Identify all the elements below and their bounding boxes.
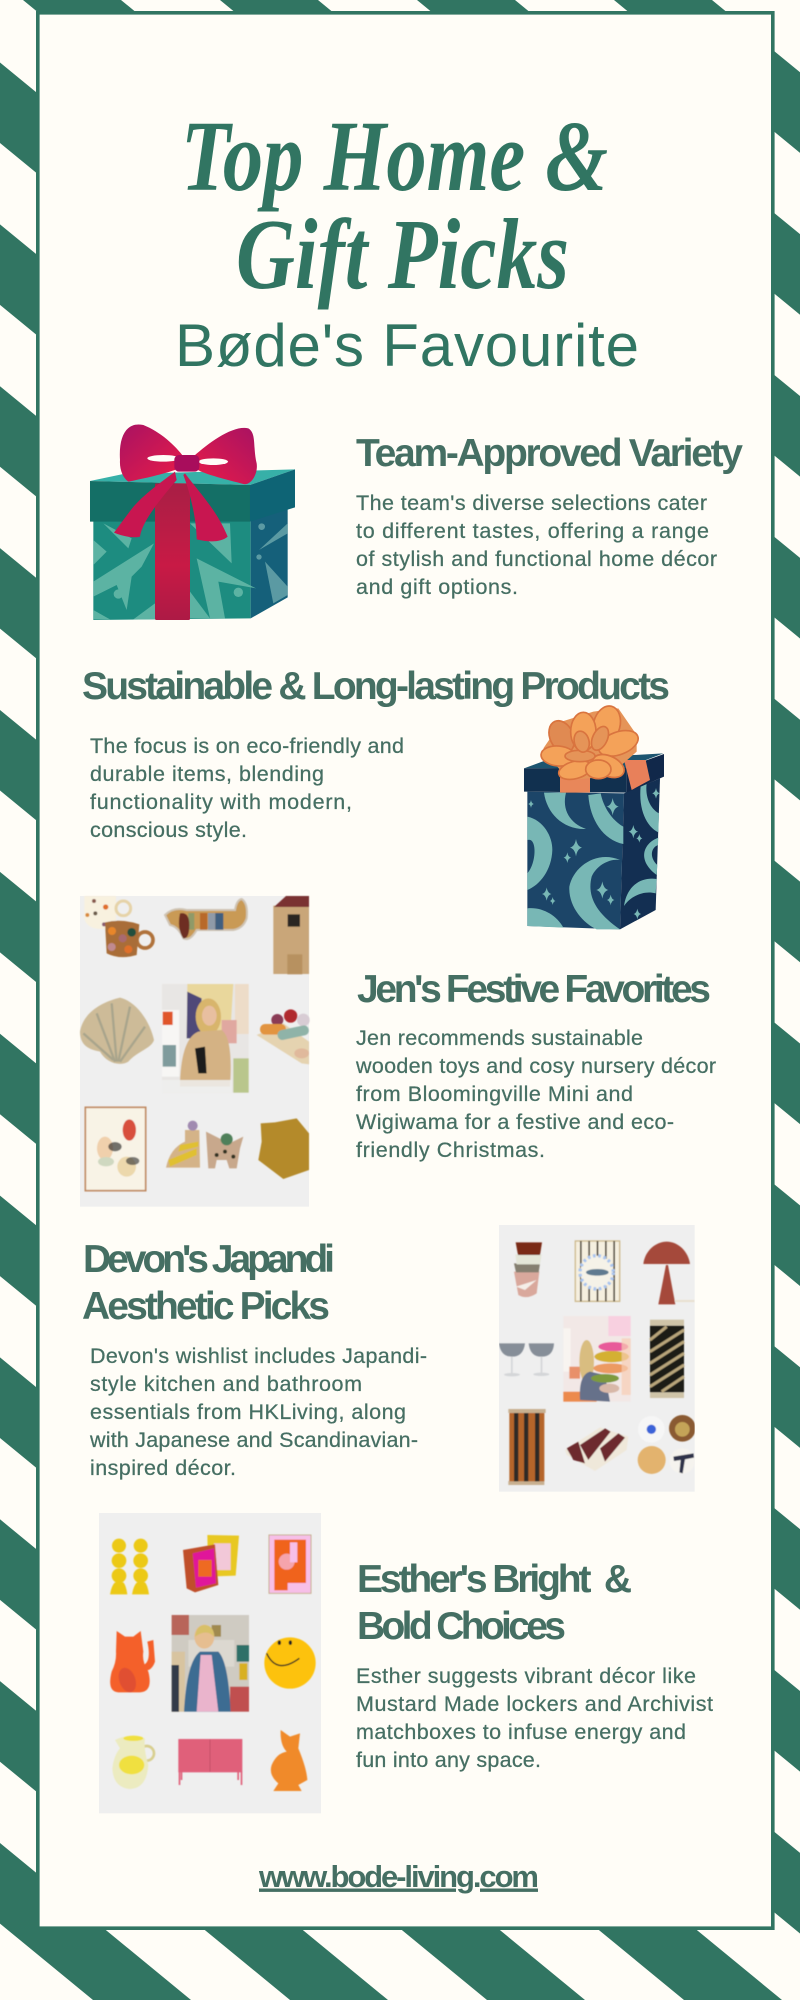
portrait of Devon	[563, 1316, 631, 1402]
lucky cat	[110, 1631, 155, 1695]
section 4 body text	[89, 1344, 427, 1480]
section 3 heading: Jen's Festive Favorites	[357, 968, 711, 1011]
diagonal striped rug	[650, 1320, 684, 1398]
icon: navy gift box with orange bow	[524, 703, 664, 929]
mugs	[84, 896, 153, 957]
stacked cups	[514, 1242, 542, 1297]
dog rug	[165, 899, 247, 939]
section 1 body text	[356, 491, 717, 599]
collage: Esther's picks	[99, 1513, 321, 1813]
section 2 body text: conscious style.	[90, 818, 247, 842]
section 4 body text: essentials from HKLiving, along	[90, 1400, 406, 1424]
ceramic bowls	[638, 1415, 696, 1474]
portrait of Esther	[172, 1615, 249, 1712]
mushroom lamp	[643, 1242, 695, 1304]
section 4 body text: style kitchen and bathroom	[90, 1372, 362, 1396]
section 5 heading: Esther's Bright &	[357, 1558, 632, 1601]
section 3 body text: Jen recommends sustainable	[356, 1026, 643, 1050]
orange fish vase	[271, 1730, 307, 1791]
section 3 body text: from Bloomingville Mini and	[356, 1082, 633, 1106]
section 2 body text: durable items, blending	[90, 762, 324, 786]
website link: www.bode-living.com	[258, 1859, 539, 1894]
section 4 heading	[82, 1238, 335, 1328]
wooden vegetable set	[257, 1009, 310, 1064]
section 5 heading	[357, 1558, 632, 1648]
title: Gift Picks	[236, 198, 569, 310]
title	[181, 100, 608, 310]
section 5 body text: Esther suggests vibrant décor like	[356, 1664, 696, 1688]
section 3 body text: wooden toys and cosy nursery décor	[355, 1054, 716, 1078]
coupe glasses	[499, 1343, 554, 1376]
section 5 body text	[356, 1664, 713, 1772]
section 3 body text: Wigiwama for a festive and eco-	[356, 1110, 674, 1134]
section 2 heading: Sustainable & Long-lasting Products	[82, 665, 670, 708]
ceramic cats	[166, 1121, 243, 1168]
section 5 body text: Mustard Made lockers and Archivist	[356, 1692, 713, 1716]
collage: Jen's picks	[80, 896, 310, 1207]
section 2 body text: functionality with modern,	[90, 790, 352, 814]
smiley lamp	[264, 1637, 316, 1689]
framed bird print	[85, 1107, 146, 1191]
section 5 body text: matchboxes to infuse energy and	[356, 1720, 686, 1744]
section 4 body text: inspired décor.	[90, 1456, 236, 1480]
section 4 heading: Devon's Japandi	[83, 1238, 335, 1281]
section 3 body text	[355, 1026, 716, 1162]
yellow pepper mills	[110, 1539, 149, 1594]
section 4 heading: Aesthetic Picks	[82, 1285, 330, 1328]
striped towels	[565, 1427, 628, 1471]
Archivist matchboxes	[183, 1535, 239, 1592]
section 1 body text: of stylish and functional home décor	[356, 547, 717, 571]
shell cushion	[80, 998, 154, 1064]
section 4 body text: with Japanese and Scandinavian-	[89, 1428, 418, 1452]
section 5 heading: Bold Choices	[357, 1605, 566, 1648]
icon: teal gift box with red bow	[90, 424, 295, 620]
section 1 body text: to different tastes, offering a range	[356, 519, 709, 543]
section 1 body text: and gift options.	[356, 575, 518, 599]
title: Top Home &	[181, 100, 608, 212]
yellow splatter jug	[112, 1736, 154, 1789]
section 2 body text	[90, 734, 404, 842]
woven house basket	[273, 896, 309, 974]
fish poster	[575, 1241, 620, 1301]
vertical striped rug	[508, 1409, 546, 1485]
section 5 body text: fun into any space.	[356, 1748, 541, 1772]
section 1 heading: Team-Approved Variety	[356, 432, 743, 475]
section 3 body text: friendly Christmas.	[356, 1138, 545, 1162]
collage: Devon's picks	[499, 1225, 696, 1492]
section 4 body text: Devon's wishlist includes Japandi-	[90, 1344, 427, 1368]
pink locker cabinet	[178, 1739, 242, 1785]
section 2 body text: The focus is on eco-friendly and	[90, 734, 404, 758]
portrait of Jen	[162, 984, 249, 1093]
subtitle: Bøde's Favourite	[175, 312, 639, 379]
mustard pouf	[258, 1118, 309, 1179]
section 1 body text: The team's diverse selections cater	[356, 491, 707, 515]
pink and orange art print	[269, 1535, 311, 1593]
